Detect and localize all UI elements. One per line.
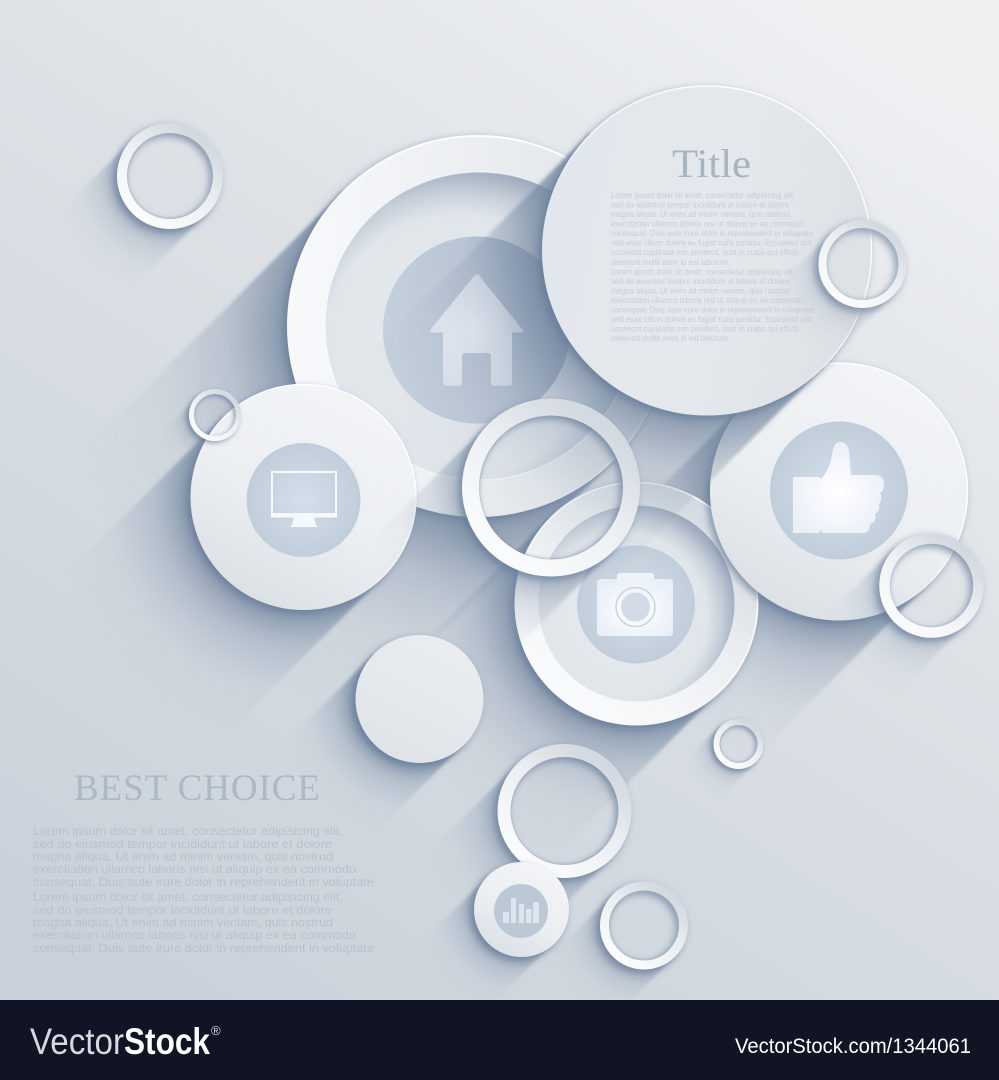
footer bar: [0, 1000, 999, 1080]
title body text: velit esse cillum dolore eu fugiat nulla pariatur. Excepteur sint: [611, 314, 813, 324]
title body text: sed do eiusmod tempor incididunt ut labore et dolore: [611, 276, 789, 286]
panel: title disc: [542, 86, 872, 416]
ring: lower right: [604, 886, 684, 965]
ring: large lower: [504, 750, 625, 872]
text block: lower left: Lorem ipsum dolor sit amet, consectetur adipisicing elit,: [33, 890, 343, 904]
title body text: occaecat cupidatat non proident, sunt in culpa qui officia: [611, 247, 799, 257]
title body text: sed do eiusmod tempor incididunt ut labore et dolore: [611, 200, 789, 210]
text block: lower left: exercitation ullamco laboris nisi ut aliquip ex ea commodo: [33, 928, 356, 942]
title body text: exercitation ullamco laboris nisi ut aliquip ex ea commodo: [611, 295, 803, 305]
panel: chart disc: [474, 862, 569, 957]
panel: camera ring: [514, 482, 758, 726]
footer logo: [30, 1021, 221, 1062]
thumbs-up icon disc: [770, 422, 908, 560]
icon: house: [430, 274, 523, 386]
title body text: [611, 190, 813, 343]
ring on thumbs-up disc: [884, 538, 978, 632]
camera icon disc: [577, 546, 695, 664]
panel: home ring: [287, 135, 669, 517]
plain disc: [356, 635, 484, 763]
title body text: velit esse cillum dolore eu fugiat nulla pariatur. Excepteur sint: [611, 238, 813, 248]
icon: monitor: [271, 472, 337, 527]
title body text: Lorem ipsum dolor sit amet, consectetur adipisicing elit,: [611, 266, 795, 276]
small ring: left: [192, 392, 238, 438]
title body text: exercitation ullamco laboris nisi ut aliquip ex ea commodo: [611, 219, 803, 229]
home icon disc: [383, 236, 570, 424]
title body text: occaecat cupidatat non proident, sunt in culpa qui officia: [611, 324, 799, 334]
title body text: deserunt mollit anim id est laborum.: [611, 333, 730, 343]
long shadows: rings on discs: [796, 234, 966, 667]
title body text: magna aliqua. Ut enim ad minim veniam, quis nostrud: [611, 285, 790, 295]
heading: best choice: BEST CHOICE: [74, 768, 320, 809]
long shadows: lower layer: [84, 139, 931, 995]
title body text: magna aliqua. Ut enim ad minim veniam, quis nostrud: [611, 209, 790, 219]
text block: lower left: consequat. Duis aute irure dolor in reprehenderit in voluptate: [33, 941, 374, 955]
text block: lower left: sed do eiusmod tempor incididunt ut labore et dolore: [33, 903, 332, 917]
ring: small lower: [716, 722, 760, 766]
center ring: [470, 407, 632, 568]
monitor icon disc: [246, 443, 360, 557]
text block: lower left: consequat. Duis aute irure dolor in reprehenderit in voluptate: [33, 875, 374, 889]
text block: lower left: magna aliqua. Ut enim ad minim veniam, quis nostrud: [33, 916, 333, 930]
icon: thumbs up: [793, 442, 884, 533]
text block: lower left: Lorem ipsum dolor sit amet, consectetur adipisicing elit,: [33, 824, 343, 838]
title body text: Lorem ipsum dolor sit amet, consectetur adipisicing elit,: [611, 190, 795, 200]
title body text: deserunt mollit anim id est laborum.: [611, 257, 730, 267]
long shadows: center ring and title disc: [402, 132, 825, 637]
chart icon disc: [494, 884, 548, 938]
ring on title disc: [822, 224, 902, 304]
panel: monitor disc: [190, 384, 416, 610]
footer url: VectorStock.com/1344061: [735, 1035, 971, 1058]
text block: lower left: magna aliqua. Ut enim ad minim veniam, quis nostrud: [33, 850, 333, 864]
panel: thumbs-up disc: [710, 362, 968, 620]
text block: lower left: exercitation ullamco laboris nisi ut aliquip ex ea commodo: [33, 862, 356, 876]
icon: camera: [597, 573, 673, 636]
ring: top left: [122, 128, 218, 224]
footer logo: Stock: [124, 1021, 210, 1062]
icon: bar chart: [503, 898, 539, 923]
footer logo: Vector: [30, 1021, 124, 1062]
title: Title: [672, 141, 751, 186]
text block: lower left: [33, 824, 374, 955]
title body text: consequat. Duis aute irure dolor in reprehenderit in voluptate: [611, 228, 813, 238]
text block: lower left: sed do eiusmod tempor incididunt ut labore et dolore: [33, 837, 332, 851]
footer logo: ®: [211, 1023, 221, 1038]
title body text: consequat. Duis aute irure dolor in reprehenderit in voluptate: [611, 304, 813, 314]
